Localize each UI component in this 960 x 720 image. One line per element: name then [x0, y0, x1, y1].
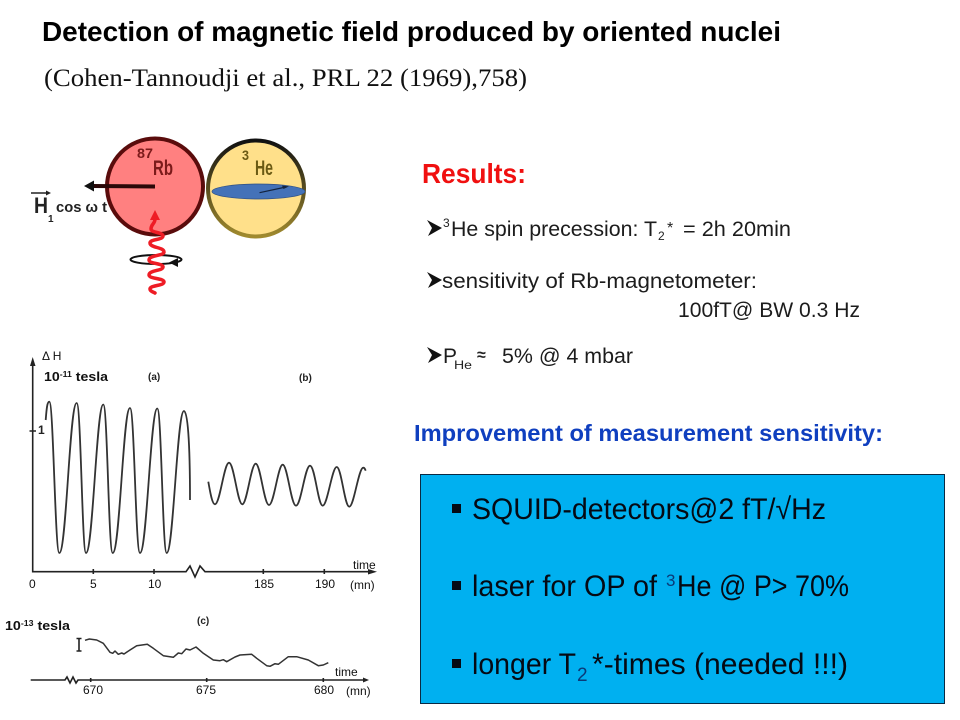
arrow: H1 field	[84, 180, 155, 192]
result: polarization: He	[454, 358, 472, 372]
item: longer T2 times	[452, 648, 848, 686]
Rb sphere: Rb	[153, 157, 173, 180]
red wavy laser beam	[149, 210, 164, 293]
results heading: Results:	[422, 158, 526, 189]
panel: improvements	[420, 474, 944, 704]
result: magnetometer sensitivity: sensitivity of Rb-magnetometer:	[442, 270, 757, 293]
chart: precession signal c	[5, 616, 371, 698]
item: laser for OP: 3	[666, 571, 675, 590]
chart: precession signal a and b	[29, 349, 377, 592]
item: laser for OP	[452, 570, 849, 603]
chart labels: time	[353, 558, 376, 572]
citation: (Cohen-Tannoudji et al., PRL 22 (1969),758)	[44, 65, 527, 92]
result: spin precession: He spin precession: T	[451, 218, 657, 241]
He sphere: He	[255, 157, 273, 180]
chart labels: 1	[38, 423, 45, 437]
result: spin precession	[427, 216, 791, 243]
chart labels: 185	[254, 577, 274, 591]
improvement heading: Improvement of measurement sensitivity:	[414, 420, 883, 446]
chart labels: tesla	[34, 618, 71, 633]
chart labels: 10	[148, 577, 162, 591]
chart labels: (mn)	[350, 578, 375, 592]
Rb sphere	[107, 138, 203, 234]
result: polarization: ≈	[477, 347, 486, 364]
rotation arrow	[130, 255, 182, 267]
chart labels: Δ H	[42, 349, 61, 363]
axis arrowheads	[30, 357, 377, 574]
trace b	[208, 463, 366, 507]
item: laser for OP: He @ P> 70%	[677, 570, 849, 603]
chart labels: -13	[21, 619, 34, 628]
chart labels: (mn)	[346, 684, 371, 698]
chart labels: time	[335, 665, 358, 679]
chart labels	[29, 349, 376, 592]
item: SQUID detectors: SQUID-detectors@2 fT/√Hz	[472, 493, 826, 526]
title: Detection of magnetic field produced by oriented nuclei	[42, 16, 781, 47]
chart labels: 675	[196, 683, 216, 697]
item: longer T2 times: *-times (needed !!!)	[592, 648, 848, 681]
item: laser for OP: laser for OP of	[472, 570, 658, 603]
result: spin precession: 3	[443, 216, 450, 230]
chart labels: (a)	[148, 372, 160, 383]
item: longer T2 times: longer T	[472, 648, 576, 681]
chart labels: (b)	[299, 373, 312, 384]
chart labels: 680	[314, 683, 334, 697]
result: polarization	[427, 345, 633, 372]
Rb sphere: 87	[137, 145, 153, 161]
result: spin precession: = 2h 20min	[683, 218, 791, 241]
result: magnetometer sensitivity	[427, 270, 860, 322]
label: H1 cos omega t	[31, 190, 107, 225]
result: spin precession: *	[667, 220, 673, 237]
trace a	[46, 402, 190, 553]
He sphere: 3	[242, 147, 249, 163]
result: spin precession: 2	[658, 229, 665, 243]
item: longer T2 times: 2	[577, 665, 588, 686]
axis and ticks	[31, 638, 366, 683]
chart labels: 5	[90, 577, 97, 591]
He sphere	[208, 140, 305, 236]
result: magnetometer sensitivity: 100fT@ BW 0.3 Hz	[678, 299, 860, 322]
result: polarization: 5% @ 4 mbar	[502, 345, 633, 368]
chart labels: 10	[44, 369, 58, 384]
result: polarization: P	[443, 345, 457, 368]
label: H1 cos omega t: cos ω t	[56, 199, 107, 216]
trace c	[85, 639, 328, 666]
diagram: Rb and He spheres	[31, 138, 305, 293]
chart labels	[5, 616, 371, 698]
chart labels: -11	[60, 370, 72, 379]
chart labels: 0	[29, 577, 36, 591]
axes	[30, 362, 372, 577]
chart labels: tesla	[72, 369, 109, 384]
chart labels: 10	[5, 618, 19, 633]
label: H1 cos omega t: 1	[48, 214, 54, 225]
chart labels: 190	[315, 577, 335, 591]
chart labels: 670	[83, 683, 103, 697]
axis arrowhead	[363, 678, 369, 682]
chart labels: (c)	[197, 616, 209, 627]
label: H1 cos omega t: H	[34, 193, 48, 218]
